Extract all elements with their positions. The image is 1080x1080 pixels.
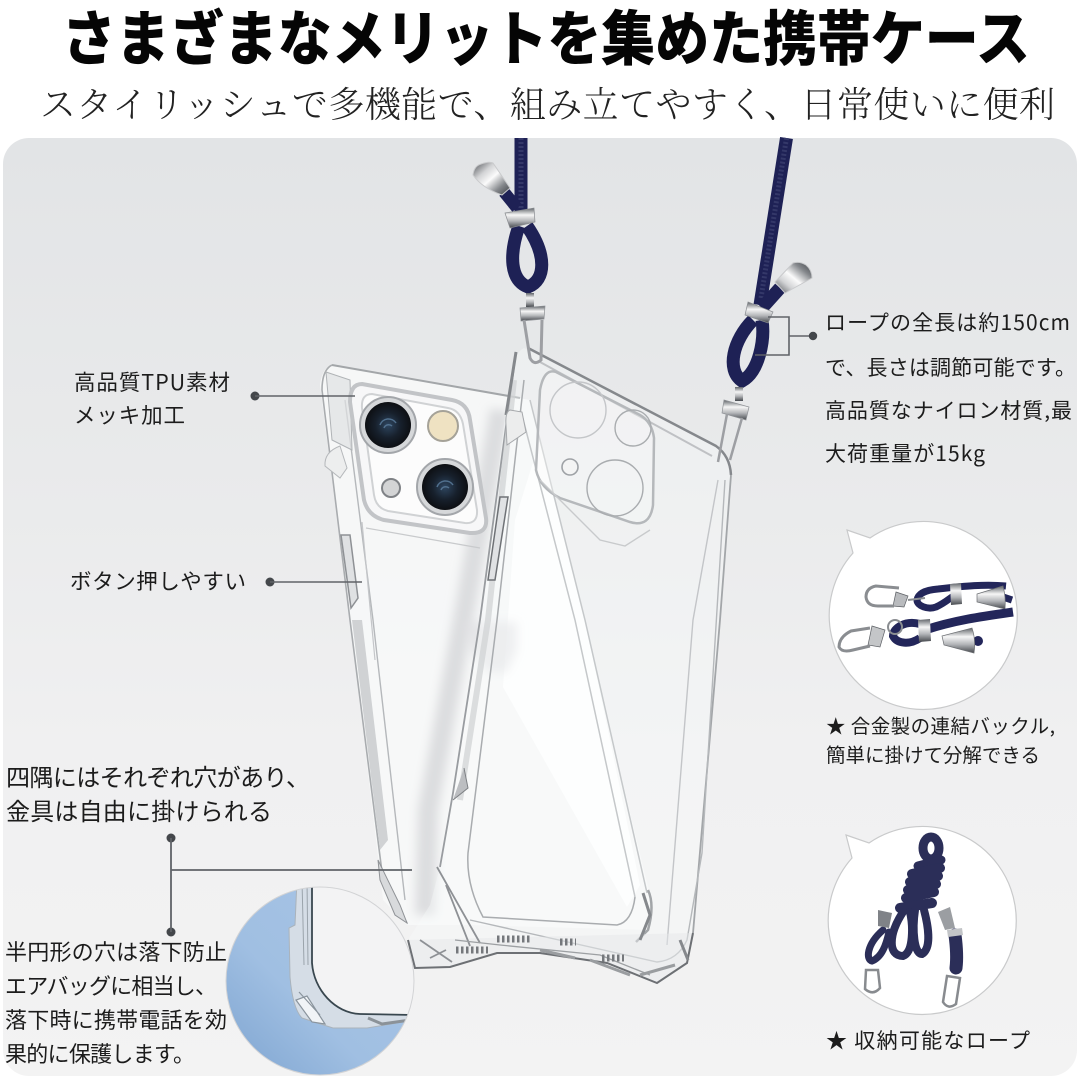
icon: microphone cutout [562, 459, 578, 475]
icon: stowed rope hardware [865, 907, 963, 1007]
callout bubble: buckle [829, 521, 1017, 709]
text: airbag description: 落下時に携帯電話を効 [5, 1003, 227, 1035]
text: buckle description [826, 710, 1055, 768]
text: rope description [825, 307, 1076, 468]
text: buckle description: ★ 合金製の連結バックル, [826, 710, 1055, 739]
swivel clasp [520, 293, 545, 363]
rope and hardware, left side [473, 138, 545, 363]
callout line: TPU [250, 392, 355, 400]
icon: microphone hole [382, 479, 400, 497]
case corner band [288, 888, 407, 1028]
bottom edge of cases [408, 867, 693, 983]
text: rope description: で、長さは調節可能です。 [825, 352, 1076, 382]
subtitle: スタイリッシュで多機能で、組み立てやすく、日常使いに便利 [40, 85, 1055, 125]
text: airbag description: エアバッグに相当し、 [5, 969, 217, 1001]
text: stowable rope: ★ 収納可能なロープ [826, 1025, 1030, 1055]
text: airbag description: 半円形の穴は落下防止 [5, 935, 227, 967]
soft shadow band [425, 410, 500, 915]
text: rope description: 大荷重量が15kg [825, 438, 985, 468]
swivel clasp [718, 387, 749, 462]
text: corner holes [6, 758, 310, 827]
right phone case [408, 348, 731, 983]
cord end cap [473, 162, 510, 195]
apple logo ghost [463, 622, 517, 673]
icon: flash [428, 411, 458, 441]
callout line: buttons [266, 578, 362, 586]
icon: camera hole 3 [587, 460, 643, 516]
light reflection [503, 440, 640, 907]
icon: coiled rope [868, 837, 957, 968]
text: airbag description: 果的に保護します。 [5, 1037, 195, 1069]
left rim [440, 352, 516, 867]
slider band [505, 208, 535, 228]
case inner white [312, 888, 414, 1014]
text: corner holes: 四隅にはそれぞれ穴があり、 [6, 758, 310, 793]
text: airbag description [5, 935, 227, 1069]
cord end cap [775, 262, 812, 293]
callout: rope length bracket [755, 317, 817, 355]
text: TPU material [74, 366, 230, 430]
text: TPU material: メッキ加工 [74, 399, 185, 430]
slider band [745, 302, 773, 323]
text: buttons: ボタン押しやすい [70, 565, 246, 596]
text: rope description: 高品質なナイロン材質,最 [825, 395, 1072, 425]
rope and hardware, right side [718, 138, 812, 462]
magnified circle outline [226, 887, 414, 1075]
magnified corner circle [226, 888, 408, 1074]
right case camera cutout [536, 371, 654, 546]
icon: lens lower [417, 459, 473, 515]
right rim [693, 475, 731, 933]
text: corner holes: 金具は自由に掛けられる [6, 792, 272, 827]
text: rope description: ロープの全長は約150cm [825, 307, 1070, 337]
icon: lens upper [360, 397, 416, 453]
left case camera module [350, 384, 486, 533]
icon: upper buckle and rope [866, 583, 1012, 609]
icon: camera hole 2 [615, 410, 651, 446]
text: TPU material: 高品質TPU素材 [74, 366, 230, 397]
text: buckle description: 簡単に掛けて分解できる [826, 739, 1040, 768]
icon: lower buckle and rope [839, 612, 1013, 653]
left phone case [320, 365, 652, 942]
callout bubble: stowed rope [828, 826, 1016, 1014]
icon: camera hole 1 [550, 382, 606, 438]
callout line: corner holes [166, 834, 412, 936]
